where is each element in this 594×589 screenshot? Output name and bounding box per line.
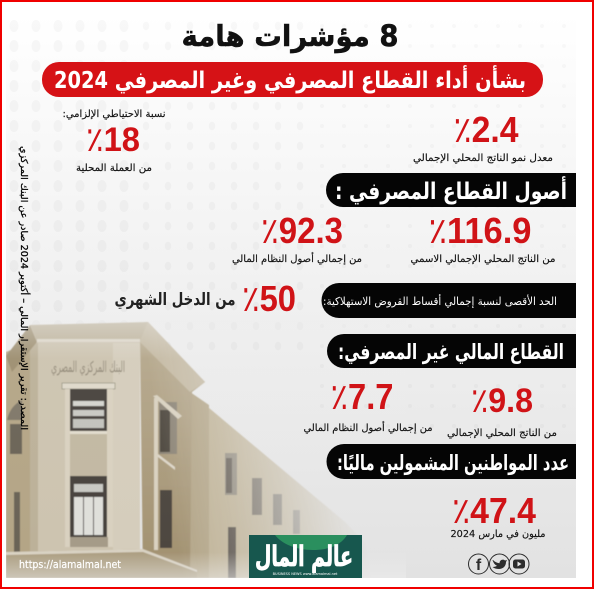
- heading: consumer loans cap: الحد الأقصى لنسبة إجمالي أقساط القروض الاستهلاكية:: [323, 294, 557, 308]
- stat: 116.9: [410, 210, 556, 265]
- stat: 7.7: [304, 376, 432, 434]
- logo: عالم المال: [255, 540, 353, 573]
- stat: 7.7: من إجمالي أصول النظام المالي: [304, 421, 432, 434]
- stat: reserve requirement: نسبة الاحتياطي الإلزامي:: [62, 109, 166, 120]
- heading: banking sector assets: [326, 173, 576, 207]
- facade light corner strip: [113, 343, 140, 553]
- stat: reserve requirement: ٪18: [86, 120, 140, 160]
- stat: 9.8: [447, 381, 557, 439]
- base cornice: [6, 552, 190, 578]
- stat: GDP growth: [413, 109, 553, 164]
- source note, vertical: المصدر: تقرير الإستقرار المالي – أكتوبر 2024 صادر عن البنك المركزي: [18, 146, 31, 430]
- side windows: [154, 398, 158, 550]
- icons: social media: f: [476, 557, 482, 574]
- photo: central bank building: [6, 322, 348, 578]
- logo: [249, 535, 362, 578]
- lower window: [70, 476, 107, 537]
- left facet: [6, 342, 30, 556]
- website url: https://alamalmal.net: [19, 559, 121, 571]
- heading: consumer loans cap: [322, 283, 576, 318]
- stat: GDP growth: ٪2.4: [454, 109, 518, 151]
- logo: BUSINESS NEWS www.alamalmal.net: [273, 572, 338, 576]
- heading: non-banking sector: [327, 334, 576, 368]
- heading: financially included citizens: [326, 444, 576, 479]
- inscription: البنك المركزي المصري: [51, 358, 125, 377]
- stat: 7.7: ٪7.7: [330, 376, 394, 418]
- stat: GDP growth: معدل نمو الناتج المحلي الإجمالي: [413, 153, 553, 164]
- stat: 9.8: ٪9.8: [471, 381, 533, 421]
- haze over the photo: [6, 322, 249, 578]
- cornice: [30, 322, 148, 342]
- stat: 50 percent of monthly income: من الدخل الشهري: [114, 290, 236, 310]
- stat: 47.4: ٪47.4: [452, 490, 536, 532]
- corner wall: [140, 342, 204, 568]
- title: 8 مؤشرات هامة: [181, 19, 398, 53]
- subtitle pill: بشأن أداء القطاع المصرفي وغير المصرفي 2024: [54, 64, 526, 94]
- stat: 92.3: ٪92.3: [261, 210, 343, 252]
- long receding wall: [208, 408, 348, 578]
- subtitle pill: [42, 62, 543, 97]
- stat: 116.9: ٪116.9: [428, 210, 532, 252]
- stat: 116.9: من الناتج المحلي الإجمالي الاسمي: [410, 254, 556, 265]
- icons: social media: [468, 554, 529, 574]
- front facade: [30, 342, 140, 554]
- stat: 92.3: [232, 210, 362, 265]
- arched side opening: [7, 400, 22, 420]
- upper window: [62, 383, 115, 389]
- stone pier of the long wall: [190, 392, 209, 578]
- stat: 50 percent of monthly income: [114, 278, 296, 320]
- stat: 9.8: من الناتج المحلي الإجمالي: [447, 428, 557, 439]
- stat: 50 percent of monthly income: ٪50: [242, 278, 296, 320]
- stat: 47.4: مليون في مارس 2024: [450, 529, 546, 540]
- stat: 92.3: من إجمالي أصول النظام المالي: [232, 252, 362, 265]
- stat: reserve requirement: [62, 109, 166, 174]
- stat: reserve requirement: من العملة المحلية: [76, 163, 152, 174]
